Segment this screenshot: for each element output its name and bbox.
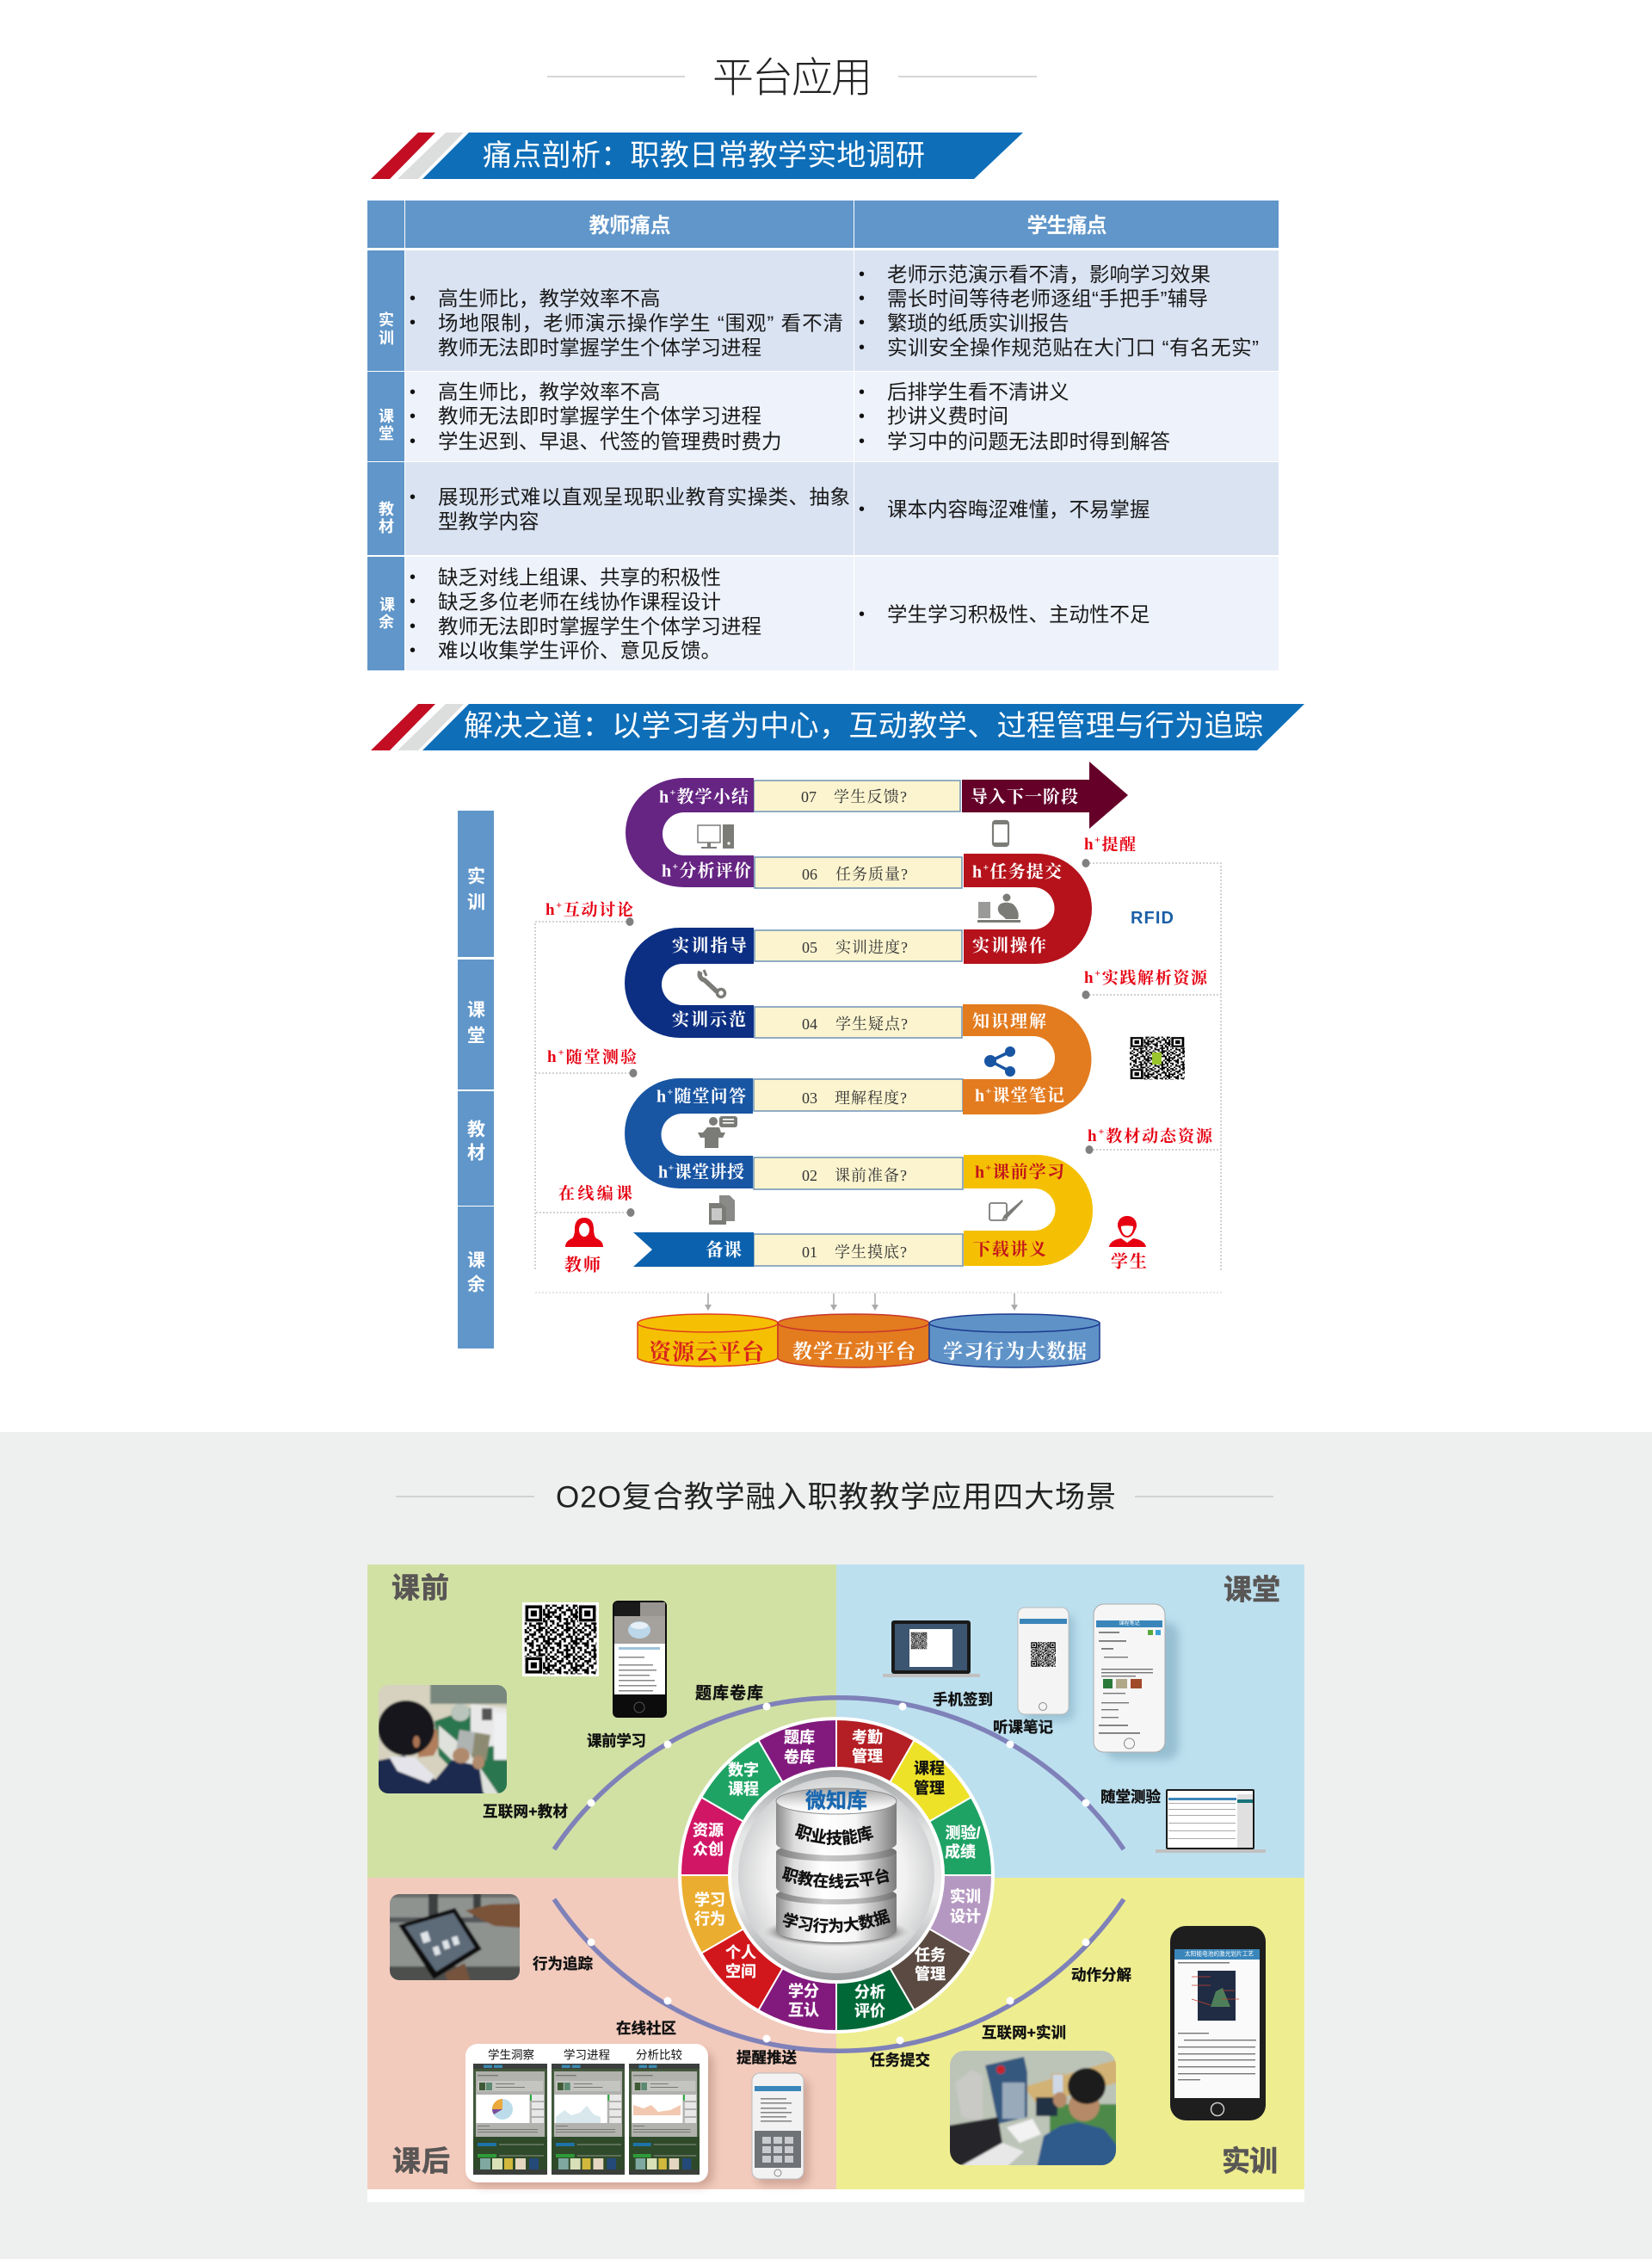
row: 教材: 材 xyxy=(379,518,394,535)
callout: h+提醒: + xyxy=(1094,833,1100,845)
snake arc: orange: h xyxy=(975,1086,984,1105)
table header row xyxy=(367,201,1279,248)
wheel segment labels: 管理 xyxy=(852,1747,883,1765)
snake arc: yellow: 下载讲义 xyxy=(973,1239,1046,1260)
row: 课堂: 课 xyxy=(379,408,394,425)
question boxes xyxy=(754,781,963,1266)
cylinder top disc: 微知库 xyxy=(805,1790,867,1812)
icon: teacher xyxy=(564,1218,603,1275)
wheel segment labels: 考勤 xyxy=(852,1729,883,1746)
snake arc: orange: 知识理解 xyxy=(972,1012,1046,1031)
wheel segment labels: 课程 xyxy=(914,1760,945,1777)
row: 教材: • xyxy=(859,500,865,519)
wheel segment labels: 资源 xyxy=(693,1822,724,1839)
snake arc: blue: h xyxy=(656,1088,666,1107)
icon: share xyxy=(984,1046,1015,1077)
callout: h+互动讨论: + xyxy=(556,898,562,910)
scene labels: 提醒推送 xyxy=(737,2049,797,2066)
row: 课堂: 学习中的问题无法即时得到解答 xyxy=(887,430,1170,453)
question box labels: 任务质量? xyxy=(835,866,908,883)
cylinder: 资源云平台 xyxy=(638,1314,778,1367)
row: 教材 xyxy=(367,462,1279,555)
row: 实训: 实 xyxy=(379,311,394,329)
snake arc: purple: h xyxy=(662,862,671,881)
banner: 痛点剖析: 痛点剖析：职教日常教学实地调研 xyxy=(483,139,925,172)
callout: h+提醒: h xyxy=(1084,836,1094,854)
callout: h+互动讨论 xyxy=(546,898,633,926)
row: 实训: • xyxy=(410,289,416,308)
wheel segment labels: 设计 xyxy=(950,1908,981,1925)
icon: student xyxy=(1109,1216,1147,1272)
icon: teacher: 教师 xyxy=(564,1255,601,1275)
wheel segment labels: 学习 xyxy=(694,1891,725,1909)
wheel segment labels: 个人 xyxy=(725,1944,756,1961)
label: RFID: RFID xyxy=(1131,909,1174,928)
scene labels: 互联网+教材 xyxy=(483,1803,568,1820)
banner: 解决之道 xyxy=(371,704,1304,750)
question box labels: 07 xyxy=(801,788,817,805)
snake arc: purple xyxy=(626,778,754,887)
card: analytics screenshots xyxy=(465,2044,713,2187)
callout: h+互动讨论: h xyxy=(546,901,555,919)
row: 实训: 需长时间等待老师逐组“手把手”辅导 xyxy=(887,287,1208,310)
snake arc: blue: h xyxy=(658,1163,668,1182)
row: 实训: 老师示范演示看不清，影响学习效果 xyxy=(887,263,1211,286)
vertical stage bars: 堂 xyxy=(467,1026,485,1046)
icon: documents xyxy=(709,1195,735,1225)
question box labels: 学生反馈? xyxy=(834,788,907,805)
photo: tablet behavior tracking xyxy=(388,1892,521,1982)
vertical stage bars: 课 xyxy=(467,1000,485,1021)
callout: h+教材动态资源: 教材动态资源 xyxy=(1106,1126,1213,1145)
wheel segment labels: 成绩 xyxy=(945,1842,976,1861)
dotted connector lines xyxy=(535,863,1222,1293)
icon: student: 学生 xyxy=(1111,1251,1147,1272)
icon: wrench xyxy=(700,970,724,997)
banner: 痛点剖析 xyxy=(371,133,1023,179)
wheel segment labels: 行为 xyxy=(694,1910,725,1928)
wheel segment labels: 管理 xyxy=(914,1779,945,1797)
snake arc: orange xyxy=(963,1004,1091,1114)
row: 课堂: 教师无法即时掌握学生个体学习进程 xyxy=(438,405,761,428)
panel heading: 实训: 实训 xyxy=(1222,2145,1278,2177)
row: 课余: • xyxy=(410,641,416,660)
wheel segment labels: 空间 xyxy=(725,1962,756,1980)
snake arc: red xyxy=(964,854,1092,964)
snake arc: navy: 实训示范 xyxy=(672,1009,746,1029)
row: 课余: • xyxy=(410,617,416,636)
callout: h+教材动态资源 xyxy=(1086,1126,1213,1154)
snake arc: orange: + xyxy=(985,1084,991,1096)
cylinder layer: 学习行为大数据 xyxy=(776,1892,897,1942)
scene labels: 任务提交 xyxy=(870,2052,930,2069)
scene labels: 在线社区 xyxy=(616,2020,676,2037)
scene labels: 手机签到 xyxy=(933,1691,993,1708)
card: analytics screenshots: 学生洞察 xyxy=(488,2048,534,2062)
panel: 课前 xyxy=(367,1565,836,1878)
row: 实训: 实训安全操作规范贴在大门口 “有名无实” xyxy=(887,336,1259,359)
vertical stage bars: 材 xyxy=(467,1143,485,1163)
table header row: 教师痛点 xyxy=(589,214,671,238)
wheel segment labels: 任务 xyxy=(915,1947,946,1964)
row: 教材: 型教学内容 xyxy=(438,510,539,533)
screenshot: comparison chart xyxy=(629,2064,700,2175)
row: 实训 xyxy=(367,250,1279,371)
row: 课余: 缺乏多位老师在线协作课程设计 xyxy=(438,590,721,613)
row: 课余: • xyxy=(859,605,865,624)
scene labels xyxy=(483,1683,1162,2069)
cylinder: 教学互动平台: 教学互动平台 xyxy=(792,1341,916,1362)
scene labels: 随堂测验 xyxy=(1100,1788,1162,1805)
row: 实训: • xyxy=(859,289,865,308)
card: analytics screenshots: 学习进程 xyxy=(564,2048,610,2062)
scene labels: 听课笔记 xyxy=(993,1719,1053,1736)
snake arc: yellow: 课前学习 xyxy=(992,1162,1064,1182)
row: 课堂: • xyxy=(410,432,416,451)
card: analytics screenshots: 分析比较 xyxy=(636,2048,682,2062)
icon: edit pen xyxy=(989,1200,1023,1220)
arc: top timeline xyxy=(554,1698,1124,1849)
snake arc: orange: 课堂笔记 xyxy=(992,1086,1064,1105)
icon: phone xyxy=(993,821,1008,846)
screenshot: student insight pie xyxy=(473,2064,547,2175)
question box labels: 01 xyxy=(802,1244,817,1261)
callout: h+实践解析资源: 实践解析资源 xyxy=(1102,967,1208,987)
panel heading: 课堂: 课堂 xyxy=(1224,1573,1280,1606)
cylinder top disc xyxy=(776,1788,897,1814)
icon: QR code large xyxy=(522,1602,599,1676)
photo: student scanning with phone xyxy=(377,1683,509,1795)
start ribbon: 备课: 备课 xyxy=(706,1239,742,1260)
wheel segment labels: 众创 xyxy=(693,1841,724,1858)
phone: sign-in screen xyxy=(1018,1608,1075,1721)
phone: teaching material screen: 太阳能电池的激光划片工艺 xyxy=(1185,1950,1254,1957)
row: 教材: • xyxy=(410,488,416,507)
wheel segment labels: 管理 xyxy=(915,1965,946,1983)
row: 课余: • xyxy=(410,568,416,587)
snake arc: red: 任务提交 xyxy=(989,862,1063,881)
laptop: quiz table xyxy=(1156,1789,1266,1853)
panel: 实训 xyxy=(836,1878,1304,2189)
panel base: white frame xyxy=(367,1565,1304,2202)
cylinder: 学习行为大数据: 学习行为大数据 xyxy=(943,1341,1087,1362)
row: 课堂: 后排学生看不清讲义 xyxy=(887,381,1069,404)
snake arc: blue: + xyxy=(667,1086,673,1098)
row: 实训: • xyxy=(859,338,865,357)
panel: 课堂 xyxy=(836,1565,1304,1878)
snake arc: navy xyxy=(625,928,754,1038)
callout: h+互动讨论: 互动讨论 xyxy=(564,900,633,919)
snake arc: blue: 随堂问答 xyxy=(674,1086,746,1107)
row: 实训: 繁琐的纸质实训报告 xyxy=(887,312,1069,334)
snake arc: red: h xyxy=(972,862,982,881)
screenshot: learning progress line xyxy=(552,2064,625,2175)
wheel segment labels: 互认 xyxy=(788,2002,819,2019)
question box labels: 学生疑点? xyxy=(835,1015,908,1033)
phone: reminder push xyxy=(752,2073,809,2185)
wheel segment labels xyxy=(693,1729,981,2020)
wheel segment labels: 测验/ xyxy=(945,1824,981,1842)
callout: h+教材动态资源: + xyxy=(1099,1126,1105,1138)
question box labels: 学生摸底? xyxy=(835,1244,907,1261)
phone: course notes screen xyxy=(1094,1604,1179,1760)
callout: h+教材动态资源: h xyxy=(1088,1127,1097,1145)
snake arc: blue: + xyxy=(669,1162,675,1174)
arrows to platforms xyxy=(705,1293,1018,1311)
vertical stage bars: 教 xyxy=(467,1120,485,1139)
row: 课堂: • xyxy=(859,432,865,451)
row: 课堂: • xyxy=(859,383,865,402)
wheel segment labels: 评价 xyxy=(854,2003,885,2020)
panel heading: 课后: 课后 xyxy=(392,2145,450,2177)
wheel segment labels: 学分 xyxy=(788,1982,819,2000)
icon: lectern speaker xyxy=(698,1116,737,1148)
scene labels: 互联网+实训 xyxy=(982,2024,1066,2041)
snake arc: navy: 实训指导 xyxy=(672,936,747,955)
row: 课堂 xyxy=(367,372,1279,461)
cylinder: 教学互动平台 xyxy=(778,1314,929,1367)
question box labels: 课前准备? xyxy=(835,1167,907,1184)
wheel segment labels: 题库 xyxy=(784,1729,815,1746)
panel: 课后 xyxy=(367,1878,836,2189)
callout: h+提醒: 提醒 xyxy=(1101,834,1136,854)
icon: person at desk xyxy=(977,893,1020,923)
row: 实训: • xyxy=(859,265,865,284)
start ribbon: 备课 xyxy=(633,1232,754,1267)
phone: course notes screen: 课程笔记 xyxy=(1119,1620,1140,1626)
phone: course app xyxy=(613,1601,667,1718)
photo: worker scanning machine xyxy=(948,2049,1118,2167)
callout: h+随堂测验: 随堂测验 xyxy=(566,1047,637,1066)
row: 课堂: 堂 xyxy=(379,425,394,442)
question box labels: 02 xyxy=(802,1167,817,1184)
row: 课堂: 抄讲义费时间 xyxy=(887,405,1008,428)
scene labels: 课前学习 xyxy=(587,1732,646,1750)
cylinder layer: 职业技能库: 职业技能库 xyxy=(795,1823,874,1845)
snake arc: yellow: + xyxy=(985,1162,991,1174)
callout: 在线编课 xyxy=(558,1184,635,1217)
row: 实训: 教师无法即时掌握学生个体学习进程 xyxy=(438,336,761,359)
snake arc: purple: + xyxy=(669,787,675,799)
vertical stage bars: 实 xyxy=(467,866,485,886)
row: 实训: • xyxy=(410,313,416,332)
row: 实训: 高生师比，教学效率不高 xyxy=(438,287,661,310)
vertical stage bars: 余 xyxy=(467,1274,485,1294)
question box labels: 05 xyxy=(802,939,817,956)
wheel: twelve function segments xyxy=(679,1718,994,2033)
callout: h+随堂测验: h xyxy=(547,1048,557,1066)
callout: h+提醒 xyxy=(1082,833,1136,867)
vertical stage bars: 课 xyxy=(467,1251,485,1270)
lower section background xyxy=(0,1432,1652,2259)
wheel segment labels: 实训 xyxy=(950,1887,981,1905)
vertical stage bars xyxy=(458,811,494,1349)
cylinder: 资源云平台: 资源云平台 xyxy=(649,1340,765,1365)
snake arc: red: 实训操作 xyxy=(972,936,1046,955)
snake arc: blue: 课堂讲授 xyxy=(675,1162,744,1182)
callout: h+实践解析资源: h xyxy=(1084,969,1094,987)
phone: teaching material screen xyxy=(1170,1926,1266,2120)
snake arc: arrow to next stage xyxy=(962,762,1128,829)
row: 课余: 课 xyxy=(379,596,395,614)
cylinder layer: 职业技能库 xyxy=(776,1803,897,1855)
wheel segment labels: 数字 xyxy=(728,1761,759,1779)
row: 课余: • xyxy=(410,592,416,611)
question box labels xyxy=(801,788,908,1261)
panel heading: 课前: 课前 xyxy=(391,1571,449,1604)
section title: O2O scenarios: O2O复合教学融入职教教学应用四大场景 xyxy=(556,1480,1116,1515)
question box labels: 06 xyxy=(802,866,817,883)
cylinder layer: 学习行为大数据: 学习行为大数据 xyxy=(783,1909,891,1933)
wheel segment labels: 课程 xyxy=(728,1781,759,1798)
row: 教材: 教 xyxy=(379,501,394,518)
row: 课余: 教师无法即时掌握学生个体学习进程 xyxy=(438,615,761,638)
section title: 平台应用: 平台应用 xyxy=(712,55,872,102)
scene labels: 动作分解 xyxy=(1071,1966,1131,1984)
cylinder layer: 职教在线云平台: 职教在线云平台 xyxy=(782,1866,890,1889)
row: 实训: • xyxy=(859,313,865,332)
row: 课堂: 高生师比，教学效率不高 xyxy=(438,381,661,404)
row: 课堂: • xyxy=(410,383,416,402)
row: 课余: 学生学习积极性、主动性不足 xyxy=(887,603,1150,626)
question box labels: 03 xyxy=(802,1089,817,1107)
row: 实训: 场地限制，老师演示操作学生 “围观” 看不清 xyxy=(438,312,843,334)
snake arc: red: + xyxy=(983,861,989,873)
snake arc: yellow xyxy=(964,1155,1093,1266)
row: 课余: 难以收集学生评价、意见反馈。 xyxy=(438,639,721,662)
cylinder: 学习行为大数据 xyxy=(929,1314,1100,1367)
scene labels: 行为追踪 xyxy=(533,1955,594,1972)
table: pain point survey xyxy=(367,201,1279,670)
database cylinder: 微知库 xyxy=(776,1788,897,1942)
row: 课堂: 学生迟到、早退、代签的管理费时费力 xyxy=(438,430,781,453)
callout: h+随堂测验 xyxy=(547,1046,637,1077)
cylinder layer: 职教在线云平台 xyxy=(776,1849,897,1899)
vertical stage bars: 训 xyxy=(467,893,485,912)
snake arc: yellow: h xyxy=(975,1163,984,1182)
icon: computer xyxy=(698,824,734,849)
callout: 在线编课: 在线编课 xyxy=(558,1184,632,1203)
scene labels: 题库卷库 xyxy=(695,1683,763,1702)
snake arc: purple: h xyxy=(659,788,669,807)
callout: h+随堂测验: + xyxy=(558,1046,564,1059)
snake arc: purple: 分析评价 xyxy=(679,861,751,881)
snake arc: blue xyxy=(625,1078,753,1188)
banner: 解决之道: 解决之道：以学习者为中心，互动教学、过程管理与行为追踪 xyxy=(464,710,1263,743)
row: 课余: 缺乏对线上组课、共享的积极性 xyxy=(438,566,721,589)
snake arc: arrow to next stage: 导入下一阶段 xyxy=(971,787,1078,807)
wheel segment labels: 分析 xyxy=(854,1984,885,2001)
arc: bottom timeline xyxy=(554,1899,1124,2051)
snake arc: purple: + xyxy=(672,861,678,873)
laptop: sign-in QR xyxy=(883,1620,980,1677)
snake arc: purple: 教学小结 xyxy=(676,787,749,807)
row: 教材: 展现形式难以直观呈现职业教育实操类、抽象 xyxy=(438,485,850,508)
center disc xyxy=(729,1768,944,1983)
wheel segment labels: 卷库 xyxy=(784,1749,815,1766)
row: 课堂: • xyxy=(859,407,865,426)
page background: upper white section xyxy=(0,0,1652,1432)
callout: h+实践解析资源: + xyxy=(1094,967,1100,979)
row: 实训: 训 xyxy=(379,330,394,347)
row: 课余: 余 xyxy=(379,613,394,631)
question box labels: 实训进度? xyxy=(835,939,908,956)
row: 课余 xyxy=(367,557,1279,670)
question box labels: 04 xyxy=(802,1015,817,1033)
callout: h+实践解析资源 xyxy=(1082,967,1208,999)
row: 教材: 课本内容晦涩难懂，不易掌握 xyxy=(887,498,1150,521)
row: 课堂: • xyxy=(410,407,416,426)
icon: QR code xyxy=(1128,1035,1187,1081)
question box labels: 理解程度? xyxy=(835,1089,907,1107)
table header row: 学生痛点 xyxy=(1027,214,1106,238)
